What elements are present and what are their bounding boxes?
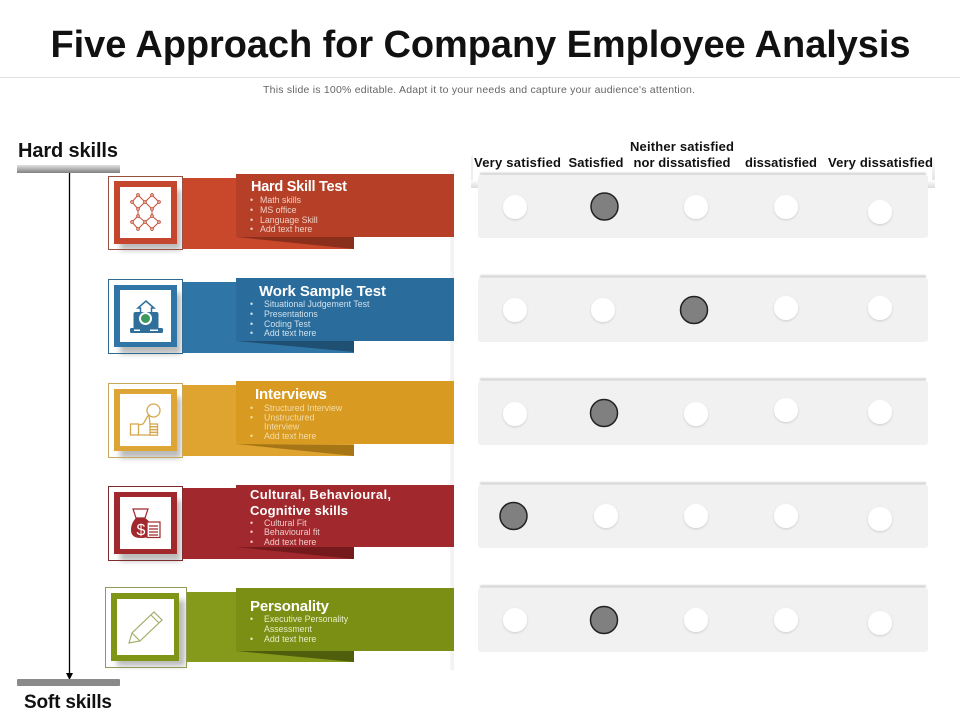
ribbon fold	[236, 444, 354, 456]
ribbon fold	[236, 651, 354, 662]
scale axis: hard skills to soft skills	[17, 140, 120, 713]
bullet list: Structured Interview	[264, 403, 343, 413]
back ribbon	[183, 178, 354, 249]
row 2: work sample test	[108, 278, 454, 354]
bullet list: •	[250, 518, 253, 528]
bullet list: •	[250, 527, 253, 537]
label: soft skills: Soft skills	[24, 692, 112, 713]
bullet list: •	[250, 431, 253, 441]
bullet list: Executive Personality	[264, 614, 349, 624]
bullet list: Language Skill	[260, 215, 318, 225]
bullet list: Presentations	[264, 309, 318, 319]
bullet list: Cultural Fit	[264, 518, 307, 528]
row title: Work Sample Test	[259, 283, 386, 300]
bullet list	[250, 614, 349, 644]
rating panel row 3	[478, 378, 928, 445]
bullet list: Math skills	[260, 195, 302, 205]
subtitle: This slide is 100% editable. Adapt it to your needs and capture your audience's attention.	[263, 84, 695, 96]
icon tile	[106, 588, 186, 668]
bullet list	[250, 299, 370, 338]
row title: Cognitive skills	[250, 503, 348, 518]
rating dots	[503, 606, 892, 635]
rating panel row 4	[478, 482, 928, 548]
bullet list: Add text here	[264, 431, 316, 441]
rating dots	[500, 502, 892, 531]
rating panel row 2	[478, 275, 928, 342]
rating column headers	[474, 139, 933, 170]
front ribbon	[236, 278, 454, 341]
icon tile	[108, 280, 182, 354]
header: satisfied: Satisfied	[568, 155, 624, 170]
icon: money bag and calculator: $	[137, 522, 146, 539]
ribbon fold	[236, 547, 354, 559]
icon: thumbs up with magnifier	[130, 404, 160, 435]
bullet list: Add text here	[260, 224, 312, 234]
icon tile	[108, 486, 182, 561]
header: very satisfied: Very satisfied	[474, 155, 561, 170]
back ribbon	[183, 488, 354, 559]
bullet list: •	[250, 328, 253, 338]
arrow	[66, 173, 73, 680]
back ribbon	[183, 385, 354, 456]
bullet list: •	[250, 403, 253, 413]
label: hard skills: Hard skills	[18, 140, 118, 162]
bullet list: Add text here	[264, 537, 316, 547]
bullet list: Situational Judgement Test	[264, 299, 370, 309]
bullet list: Add text here	[264, 328, 316, 338]
bullet list	[250, 403, 343, 441]
front ribbon	[236, 588, 454, 651]
bullet list: Interview	[264, 422, 300, 432]
bullet list: •	[250, 412, 253, 422]
bullet list: •	[250, 205, 253, 215]
header: neither: Neither satisfied	[630, 139, 734, 154]
row title	[250, 487, 391, 518]
bullet list: Unstructured	[264, 412, 314, 422]
bottom axis bar	[17, 679, 120, 686]
back ribbon	[183, 282, 354, 353]
bullet list: •	[250, 537, 253, 547]
icon tile	[108, 176, 182, 250]
top axis bar	[17, 165, 120, 173]
row title: Hard Skill Test	[251, 179, 347, 195]
bullet list: •	[250, 634, 253, 644]
title: Five Approach for Company Employee Analysis	[50, 24, 910, 66]
bullet list: Coding Test	[264, 319, 311, 329]
bullet list: •	[250, 215, 253, 225]
bullet list: Assessment	[264, 624, 312, 634]
icon: laptop with house	[130, 301, 163, 333]
bullet list	[250, 518, 320, 547]
row title: Cultural, Behavioural,	[250, 487, 391, 502]
row 4: cultural, behavioural, cognitive skills	[108, 485, 454, 561]
ribbon fold	[236, 237, 354, 249]
front ribbon	[236, 485, 454, 547]
header: very dissatisfied: Very dissatisfied	[828, 155, 933, 170]
bullet list: MS office	[260, 205, 297, 215]
rating column header backing	[471, 156, 935, 188]
ribbon fold	[236, 341, 354, 352]
bullet list: •	[250, 309, 253, 319]
bullet list: •	[250, 614, 253, 624]
rating dots	[503, 193, 892, 224]
faint divider shadow	[450, 170, 454, 670]
icon: pencil	[129, 612, 162, 643]
row 1: hard skill test	[108, 174, 454, 250]
bullet list: Add text here	[264, 634, 316, 644]
rating dots	[503, 296, 892, 324]
icon tile	[108, 384, 182, 458]
header: neither	[630, 139, 734, 170]
back ribbon	[187, 592, 354, 662]
front ribbon	[236, 174, 454, 237]
row title: Interviews	[255, 386, 327, 403]
bullet list: •	[250, 224, 253, 234]
row 5: personality	[106, 588, 454, 668]
icon: network lattice	[131, 194, 160, 230]
bullet list: •	[250, 195, 253, 205]
bullet list: •	[250, 319, 253, 329]
row title: Personality	[250, 598, 330, 615]
rating panel row 5	[478, 585, 928, 652]
row 3: interviews	[108, 381, 454, 458]
header: dissatisfied: dissatisfied	[745, 155, 817, 170]
rating dots	[503, 398, 892, 426]
rating panel row 1	[478, 172, 928, 238]
bullet list: •	[250, 299, 253, 309]
bullet list: Behavioural fit	[264, 527, 320, 537]
header: neither: nor dissatisfied	[634, 155, 731, 170]
bullet list	[250, 195, 318, 234]
front ribbon	[236, 381, 454, 444]
